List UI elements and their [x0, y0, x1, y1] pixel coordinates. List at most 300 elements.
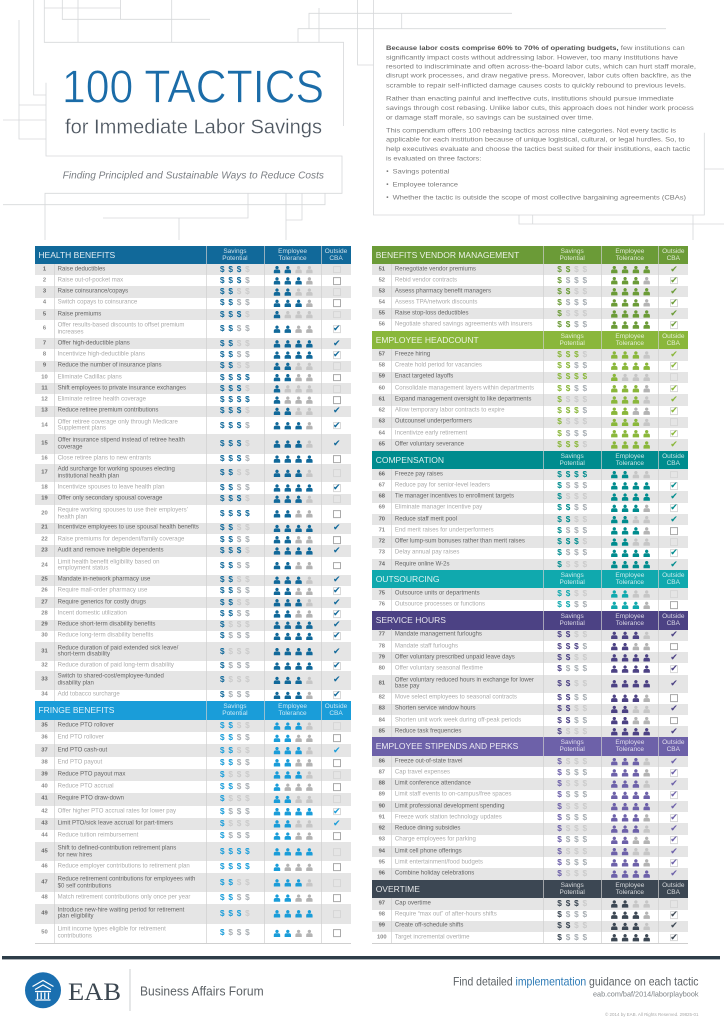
row 50: $: [228, 928, 233, 937]
row 55: Raise stop-loss deductibles: [395, 311, 468, 317]
row 18: $: [228, 483, 233, 492]
row 11: 11: [41, 385, 48, 391]
row 34: Add tobacco surcharge: [58, 692, 120, 698]
row 67: 67: [379, 482, 385, 488]
row 75: $: [557, 589, 562, 598]
row 67: ✔: [670, 481, 678, 491]
row 48: 48: [41, 895, 48, 901]
row 36: 36: [41, 735, 48, 741]
row 4: Switch copays to coinsurance: [58, 300, 137, 306]
row 65: $: [574, 440, 579, 449]
row 95: [372, 857, 688, 868]
row 6: $: [237, 324, 241, 333]
row 84: [372, 715, 688, 726]
row 86: ✔: [670, 757, 678, 767]
row 52: 52: [379, 277, 385, 283]
row 8: $: [237, 350, 241, 359]
section header: employee stipends and perks: Savings: [561, 739, 584, 746]
row 99: [372, 921, 688, 932]
row 62: [372, 406, 688, 417]
header decoration, title and introduction: [3, 0, 724, 240]
row 46: Reduce employer contributions to retirement plan: [58, 864, 190, 870]
row 36: $: [228, 733, 233, 742]
row 27: $: [228, 598, 233, 607]
text block: introduction: is evaluated on three factors:: [386, 155, 481, 162]
row 38: $: [220, 758, 225, 767]
row 45: for new hires: [58, 852, 92, 858]
row 36: End PTO rollover: [58, 735, 104, 741]
row 96: [372, 868, 688, 880]
row 35: $: [237, 721, 241, 730]
row 21: $: [237, 523, 241, 532]
row 24: $: [237, 561, 241, 570]
row 88: $: [566, 779, 570, 788]
row 85: $: [557, 727, 562, 736]
row 78: Mandate staff furloughs: [395, 643, 458, 649]
row 72: $: [574, 537, 579, 546]
row 3: $: [220, 287, 225, 296]
row 8: $: [220, 350, 225, 359]
row 86: [372, 756, 688, 767]
row 44: 44: [41, 833, 48, 839]
row 43: $: [237, 819, 241, 828]
row 38: [41, 759, 341, 768]
row 10: $: [228, 373, 233, 382]
section header: overtime: Potential: [560, 889, 585, 896]
row 63: $: [566, 417, 570, 426]
row 33: Switch to shared-cost/employee-funded: [58, 674, 164, 680]
row 20: 20: [41, 510, 48, 516]
row 5: Raise premiums: [58, 311, 101, 317]
row 94: $: [582, 847, 587, 856]
section header: benefits vendor management: BENEFITS VENDOR MANAGEMENT: [376, 250, 519, 260]
row 63: Outcounsel underperformers: [395, 419, 472, 425]
row 43: $: [245, 819, 250, 828]
row 36: $: [220, 733, 225, 742]
row 7: ✔: [333, 339, 341, 349]
row 9: [35, 361, 351, 372]
row 97: 97: [379, 900, 385, 906]
row 99: ✔: [670, 922, 678, 932]
row 89: $: [574, 790, 579, 799]
tagline: Finding Principled and Sustainable Ways to Reduce Costs: [63, 171, 324, 182]
row 39: [35, 769, 351, 781]
row 68: 68: [379, 494, 385, 500]
row 7: $: [245, 339, 250, 348]
row 9: 9: [43, 363, 46, 369]
row 93: $: [557, 835, 562, 844]
row 66: $: [557, 470, 562, 479]
section header: overtime: Outside: [662, 882, 684, 889]
row 58: $: [574, 361, 579, 370]
row 57: ✔: [670, 350, 678, 360]
row 5: [35, 309, 351, 320]
text block: introduction: Employee tolerance: [393, 182, 458, 189]
row 9: $: [245, 361, 250, 370]
row 21: $: [228, 523, 233, 532]
text block: introduction: •: [386, 195, 389, 202]
section header: fringe benefits: Potential: [222, 710, 248, 717]
row 75: $: [574, 589, 579, 598]
row 29: 29: [41, 622, 48, 628]
row 51: ✔: [670, 265, 678, 275]
row 23: Audit and remove ineligible dependents: [58, 548, 164, 554]
row 9: $: [220, 361, 225, 370]
row 38: $: [237, 758, 241, 767]
row 63: 63: [379, 419, 385, 425]
row 99: $: [566, 921, 570, 930]
section header: employee headcount: Employee: [615, 333, 644, 340]
row 43: [35, 818, 351, 830]
row 73: 73: [379, 550, 385, 556]
row 45: $: [220, 847, 225, 856]
row 19: $: [220, 494, 225, 503]
row 69: $: [566, 503, 570, 512]
row 41: 41: [41, 796, 48, 802]
row 87: Cap travel expenses: [395, 770, 450, 776]
row 26: $: [237, 586, 241, 595]
row 30: $: [237, 631, 241, 640]
row 26: $: [220, 586, 225, 595]
row 88: $: [582, 779, 587, 788]
row 94: $: [574, 847, 579, 856]
row 27: [35, 597, 351, 608]
row 75: $: [566, 589, 570, 598]
row 47: $: [228, 878, 233, 887]
row 98: Require “max out” of after-hours shifts: [395, 912, 497, 918]
section header: compensation: Outside: [662, 453, 684, 460]
section header: employee headcount: Tolerance: [616, 340, 644, 347]
row 43: 43: [41, 820, 48, 826]
section header: fringe benefits: [35, 701, 351, 720]
row 81: $: [582, 679, 587, 688]
row 100: $: [574, 933, 579, 942]
row 66: Freeze pay raises: [395, 471, 443, 477]
row 59: Enact targeted layoffs: [395, 374, 453, 380]
row 23: 23: [41, 547, 48, 553]
row 24: Limit health benefit eligibility based on: [58, 559, 159, 565]
row 32: 32: [41, 663, 48, 669]
section header: employee headcount: CBA: [667, 340, 680, 347]
row 1: 1: [43, 266, 46, 272]
section header: employee headcount: EMPLOYEE HEADCOUNT: [376, 335, 479, 345]
row 13: $: [228, 406, 233, 415]
row 48: [35, 892, 351, 904]
text block: introduction: disrupt work processes, and draw negative press. Moreover, labor cuts often backfire, as the: [386, 73, 692, 80]
text block: introduction: Because labor costs comprise 60% to 70% of operating budgets, few institutions can: [386, 45, 685, 52]
row 61: $: [566, 395, 570, 404]
row 10: Eliminate Cadillac plans: [58, 374, 122, 380]
row 66: $: [566, 470, 570, 479]
section header: fringe benefits: Savings: [223, 703, 246, 710]
row 35: $: [245, 721, 250, 730]
row 15: coverage: [58, 444, 82, 450]
row 73: $: [574, 548, 579, 557]
row 65: $: [582, 440, 587, 449]
row 6: $: [220, 324, 225, 333]
row 97: Cap overtime: [395, 901, 431, 907]
row 69: $: [574, 503, 579, 512]
row 72: $: [582, 537, 587, 546]
row 17: $: [228, 468, 233, 477]
row 7: 7: [43, 340, 46, 346]
row 96: $: [582, 869, 587, 878]
row 76: Outsource processes or functions: [395, 602, 485, 608]
row 98: $: [582, 910, 587, 919]
row 79: $: [574, 653, 579, 662]
row 22: $: [220, 535, 225, 544]
row 95: $: [582, 858, 587, 867]
row 79: ✔: [670, 653, 678, 663]
row 76: $: [566, 600, 570, 609]
row 50: $: [220, 928, 225, 937]
section header: employee stipends and perks: Tolerance: [616, 746, 644, 753]
row 68: $: [574, 492, 579, 501]
section header: employee headcount: Potential: [560, 340, 585, 347]
row 17: Add surcharge for working spouses electing: [58, 467, 175, 473]
row 42: ✔: [333, 807, 341, 817]
row 88: $: [557, 779, 562, 788]
row 24: $: [220, 561, 225, 570]
section header: compensation: COMPENSATION: [376, 455, 444, 465]
row 27: $: [237, 598, 241, 607]
row 91: 91: [379, 814, 385, 820]
row 15: Offer insurance stipend instead of retiree health: [58, 437, 185, 443]
row 17: [35, 464, 351, 482]
row 89: $: [557, 790, 562, 799]
row 20: $: [220, 509, 225, 518]
row 80: Offer voluntary seasonal flextime: [395, 666, 483, 672]
row 31: $: [237, 647, 241, 656]
row 13: $: [220, 406, 225, 415]
row 83: ✔: [670, 704, 678, 714]
row 58: $: [557, 361, 562, 370]
row 50: 50: [41, 930, 48, 936]
row 44: $: [245, 831, 250, 840]
text block: introduction: scramble to repair self-inflicted damage causes costs to quickly rebound to previous levels.: [386, 83, 686, 90]
row 68: Tie manager incentives to enrollment targets: [395, 494, 514, 500]
row 19: $: [245, 494, 250, 503]
row 61: [372, 394, 688, 406]
row 35: 35: [41, 723, 48, 729]
row 87: ✔: [670, 768, 678, 778]
row 22: [41, 536, 341, 544]
row 87: $: [582, 768, 587, 777]
row 56: Negotiate shared savings agreements with insurers: [395, 322, 532, 328]
row 8: ✔: [333, 350, 341, 360]
row 4: $: [245, 298, 250, 307]
row 100: [372, 932, 688, 944]
row 4: 4: [43, 300, 46, 306]
row 30: $: [220, 631, 225, 640]
row 82: $: [566, 693, 570, 702]
row 90: ✔: [670, 802, 678, 812]
row 74: $: [557, 560, 562, 569]
row 38: $: [228, 758, 233, 767]
row 8: Incentivize high-deductible plans: [58, 352, 145, 358]
row 89: $: [582, 790, 587, 799]
row 26: ✔: [333, 587, 341, 597]
row 73: ✔: [670, 548, 678, 558]
row 52: $: [566, 276, 570, 285]
row 94: Limit cell phone offerings: [395, 848, 462, 854]
section header: health benefits: Outside: [325, 248, 347, 255]
row 92: [372, 823, 688, 835]
row 47: $: [245, 878, 250, 887]
row 62: $: [574, 406, 579, 415]
row 13: Reduce retiree premium contributions: [58, 408, 158, 414]
row 92: $: [582, 824, 587, 833]
row 24: 24: [41, 562, 48, 568]
row 34: [41, 691, 341, 699]
row 98: ✔: [670, 910, 678, 920]
row 95: ✔: [670, 858, 678, 868]
row 70: Reduce staff merit pool: [395, 516, 457, 522]
url: eab.com/baf/2014/laborplaybook: [593, 992, 699, 999]
row 100: $: [557, 933, 562, 942]
row 4: $: [220, 298, 225, 307]
row 82: $: [557, 693, 562, 702]
row 57: 57: [379, 351, 385, 357]
row 31: $: [228, 647, 233, 656]
row 57: [372, 349, 688, 361]
section header: overtime: [372, 880, 688, 898]
row 96: $: [557, 869, 562, 878]
row 15: ✔: [333, 439, 341, 449]
section header: fringe benefits: Employee: [278, 703, 307, 710]
row 1: $: [237, 265, 241, 274]
row 33: $: [245, 675, 250, 684]
row 58: $: [566, 361, 570, 370]
row 32: $: [245, 661, 250, 670]
row 84: Shorten unit work week during off-peak periods: [395, 717, 521, 723]
row 99: 99: [379, 923, 385, 929]
title: 100 TACTICS: [62, 61, 324, 113]
row 84: $: [574, 716, 579, 725]
row 71: $: [574, 526, 579, 535]
row 14: $: [245, 421, 250, 430]
section header: benefits vendor management: Employee: [615, 248, 644, 255]
section header: employee headcount: Outside: [662, 333, 684, 340]
row 5: $: [237, 310, 241, 319]
row 12: $: [220, 395, 225, 404]
row 78: $: [557, 642, 562, 651]
row 25: 25: [41, 577, 48, 583]
row 80: ✔: [670, 664, 678, 674]
row 86: $: [566, 757, 570, 766]
row 53: $: [582, 287, 587, 296]
section header: service hours: Savings: [561, 613, 584, 620]
row 12: $: [228, 395, 233, 404]
row 32: Reduce duration of paid long-term disability: [58, 663, 174, 669]
row 23: $: [237, 546, 241, 555]
row 11: Shift employees to private insurance exchanges: [58, 386, 186, 392]
row 90: Limit professional development spending: [395, 803, 504, 809]
row 3: $: [228, 287, 233, 296]
row 69: ✔: [670, 503, 678, 513]
row 34: $: [220, 690, 225, 699]
row 37: $: [245, 746, 250, 755]
row 49: plan eligibility: [58, 914, 94, 920]
row 49: 49: [41, 910, 48, 916]
row 83: $: [574, 704, 579, 713]
row 15: $: [245, 439, 250, 448]
row 56: $: [582, 320, 587, 329]
row 37: [35, 744, 351, 757]
row 26: 26: [41, 588, 48, 594]
row 78: $: [566, 642, 570, 651]
row 31: 31: [41, 648, 48, 654]
row 80: $: [557, 664, 562, 673]
row 55: ✔: [670, 309, 678, 319]
row 82: [372, 693, 688, 704]
row 46: $: [245, 862, 250, 871]
row 77: $: [557, 630, 562, 639]
row 77: $: [582, 630, 587, 639]
row 18: $: [245, 483, 250, 492]
row 54: 54: [379, 299, 385, 305]
row 75: Outsource units or departments: [395, 591, 480, 597]
row 3: [35, 286, 351, 298]
row 74: $: [582, 560, 587, 569]
row 53: ✔: [670, 287, 678, 297]
row 81: Offer voluntary reduced hours in exchange for lower: [395, 677, 534, 683]
row 18: $: [220, 483, 225, 492]
row 54: ✔: [670, 298, 678, 308]
row 67: $: [574, 481, 579, 490]
row 48: $: [228, 893, 233, 902]
panel: benefits vendor management: [372, 246, 688, 331]
row 63: $: [574, 417, 579, 426]
copyright: © 2014 by EAB. All Rights Reserved. 29825-01: [605, 1012, 699, 1017]
row 33: 33: [41, 677, 48, 683]
row 30: Reduce long-term disability benefits: [58, 633, 153, 639]
row 49: Introduce new-hire waiting period for retirement: [58, 907, 184, 913]
section header: health benefits: HEALTH BENEFITS: [38, 250, 115, 260]
row 93: [372, 835, 688, 846]
row 31: Reduce duration of paid extended sick leave/: [58, 645, 178, 651]
row 5: $: [228, 310, 233, 319]
row 81: ✔: [670, 679, 678, 689]
row 59: $: [574, 372, 579, 381]
row 19: Offer only secondary spousal coverage: [58, 496, 162, 502]
row 62: 62: [379, 408, 385, 414]
row 76: 76: [379, 602, 385, 608]
row 88: [372, 778, 688, 790]
row 11: $: [245, 384, 250, 393]
section header: service hours: SERVICE HOURS: [376, 615, 446, 625]
row 85: Reduce task frequencies: [395, 728, 461, 734]
row 88: ✔: [670, 779, 678, 789]
row 54: $: [582, 298, 587, 307]
row 33: $: [220, 675, 225, 684]
row 67: $: [566, 481, 570, 490]
row 3: 3: [43, 289, 46, 295]
row 71: 71: [379, 527, 385, 533]
row 39: 39: [41, 771, 48, 777]
section header: outsourcing: Potential: [560, 579, 585, 586]
row 86: $: [557, 757, 562, 766]
row 74: ✔: [670, 560, 678, 570]
row 28: $: [237, 609, 241, 618]
row 28: $: [228, 609, 233, 618]
section header: benefits vendor management: Potential: [560, 255, 585, 262]
row 65: Offer voluntary severance: [395, 442, 464, 448]
row 17: $: [220, 468, 225, 477]
row 3: Raise coinsurance/copays: [58, 289, 128, 295]
section header: outsourcing: Employee: [615, 572, 644, 579]
row 92: ✔: [670, 824, 678, 834]
